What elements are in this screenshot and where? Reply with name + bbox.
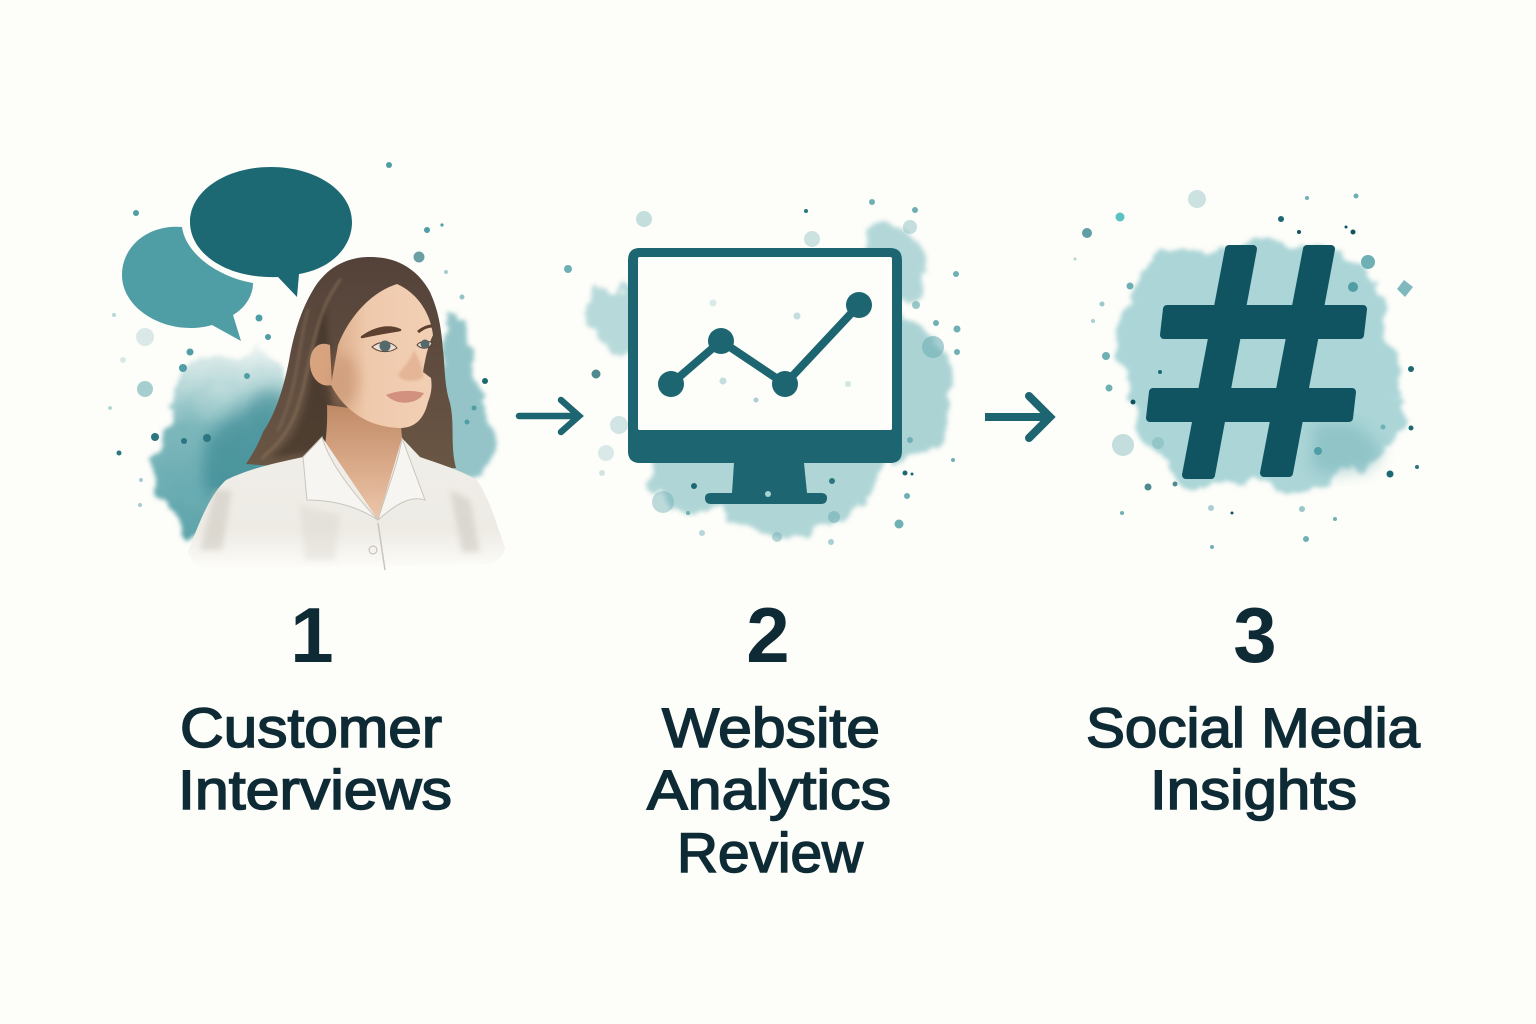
arrow: step 1 to step 2 bbox=[519, 400, 579, 432]
label: Customer Interviews: Interviews bbox=[178, 758, 452, 821]
label: Social Media Insights bbox=[1086, 696, 1421, 821]
speech bubble: dark bbox=[190, 167, 352, 297]
label: Website Analytics Review: Analytics bbox=[647, 758, 891, 821]
step 1: number and label bbox=[178, 591, 452, 821]
hair shading bbox=[262, 280, 340, 458]
number 3: 3 bbox=[1233, 591, 1277, 679]
neck bbox=[315, 405, 424, 523]
panel: website analytics illustration bbox=[564, 199, 960, 545]
paint splatter bbox=[1074, 190, 1419, 549]
label: Customer Interviews: Customer bbox=[180, 696, 442, 759]
facial features bbox=[331, 326, 432, 406]
label: Website Analytics Review: Website bbox=[662, 696, 880, 759]
step 2: number and label bbox=[647, 591, 891, 884]
label: Social Media Insights: Social Media bbox=[1086, 696, 1421, 759]
person portrait bbox=[188, 257, 505, 570]
label: Website Analytics Review bbox=[647, 696, 891, 884]
number 1: 1 bbox=[290, 591, 334, 679]
line chart on screen bbox=[658, 292, 872, 397]
paint splatter bbox=[564, 199, 960, 545]
arrow: step 2 to step 3 bbox=[985, 396, 1050, 438]
monitor bbox=[628, 248, 902, 504]
panel: social media insights illustration bbox=[1074, 190, 1419, 549]
face bbox=[331, 284, 433, 428]
shirt bbox=[188, 437, 505, 570]
hair bbox=[246, 257, 456, 470]
speech bubble: light bbox=[122, 227, 253, 341]
watercolor wash behind person bbox=[150, 320, 492, 535]
paint splatter bbox=[108, 162, 488, 507]
watercolor wash behind monitor bbox=[588, 221, 950, 536]
watercolor wash behind hashtag bbox=[1122, 242, 1401, 494]
step 3: number and label bbox=[1086, 591, 1421, 821]
label: Customer Interviews bbox=[178, 696, 452, 821]
shirt collar bbox=[303, 437, 425, 570]
shirt folds bbox=[200, 490, 480, 560]
label: Website Analytics Review: Review bbox=[677, 821, 864, 884]
panel: customer interviews illustration bbox=[108, 162, 505, 570]
ear bbox=[310, 344, 332, 386]
number 2: 2 bbox=[746, 591, 790, 679]
label: Social Media Insights: Insights bbox=[1150, 758, 1357, 821]
hashtag symbol bbox=[1150, 249, 1363, 475]
